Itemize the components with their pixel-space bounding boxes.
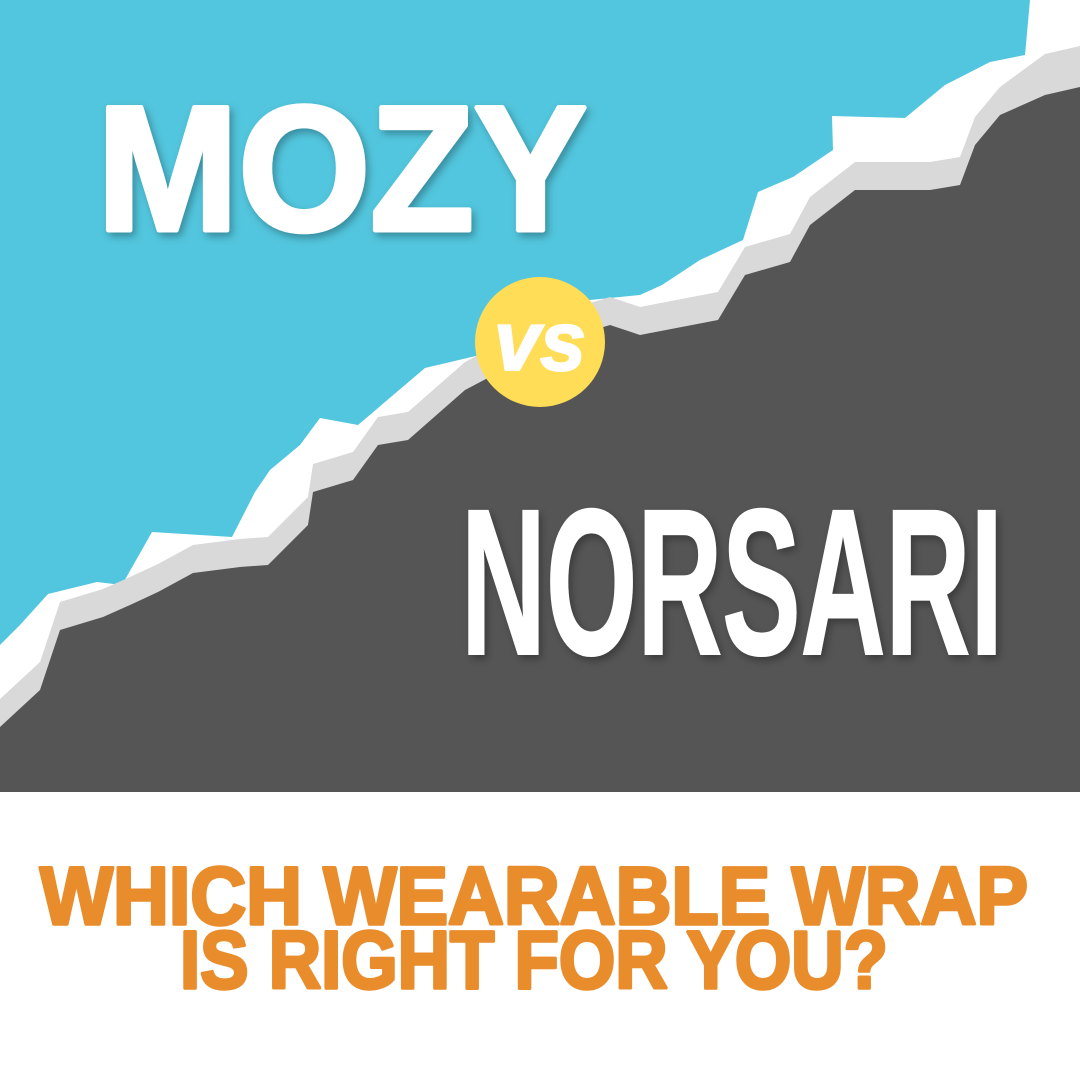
- subtitle question: IS RIGHT FOR YOU?: [180, 915, 888, 1006]
- background white torn area: [0, 0, 1080, 792]
- badge: vs circle: [475, 277, 605, 407]
- panel: cyan top region: [0, 0, 1030, 645]
- subtitle question: [40, 851, 1028, 1006]
- panel: dark grey lower region: [0, 87, 1080, 792]
- shadow strip: [0, 46, 1080, 792]
- subtitle question: WHICH WEARABLE WRAP: [40, 851, 1028, 942]
- badge: vs circle: vs: [494, 294, 586, 388]
- heading: MOZY: MOZY: [97, 69, 587, 268]
